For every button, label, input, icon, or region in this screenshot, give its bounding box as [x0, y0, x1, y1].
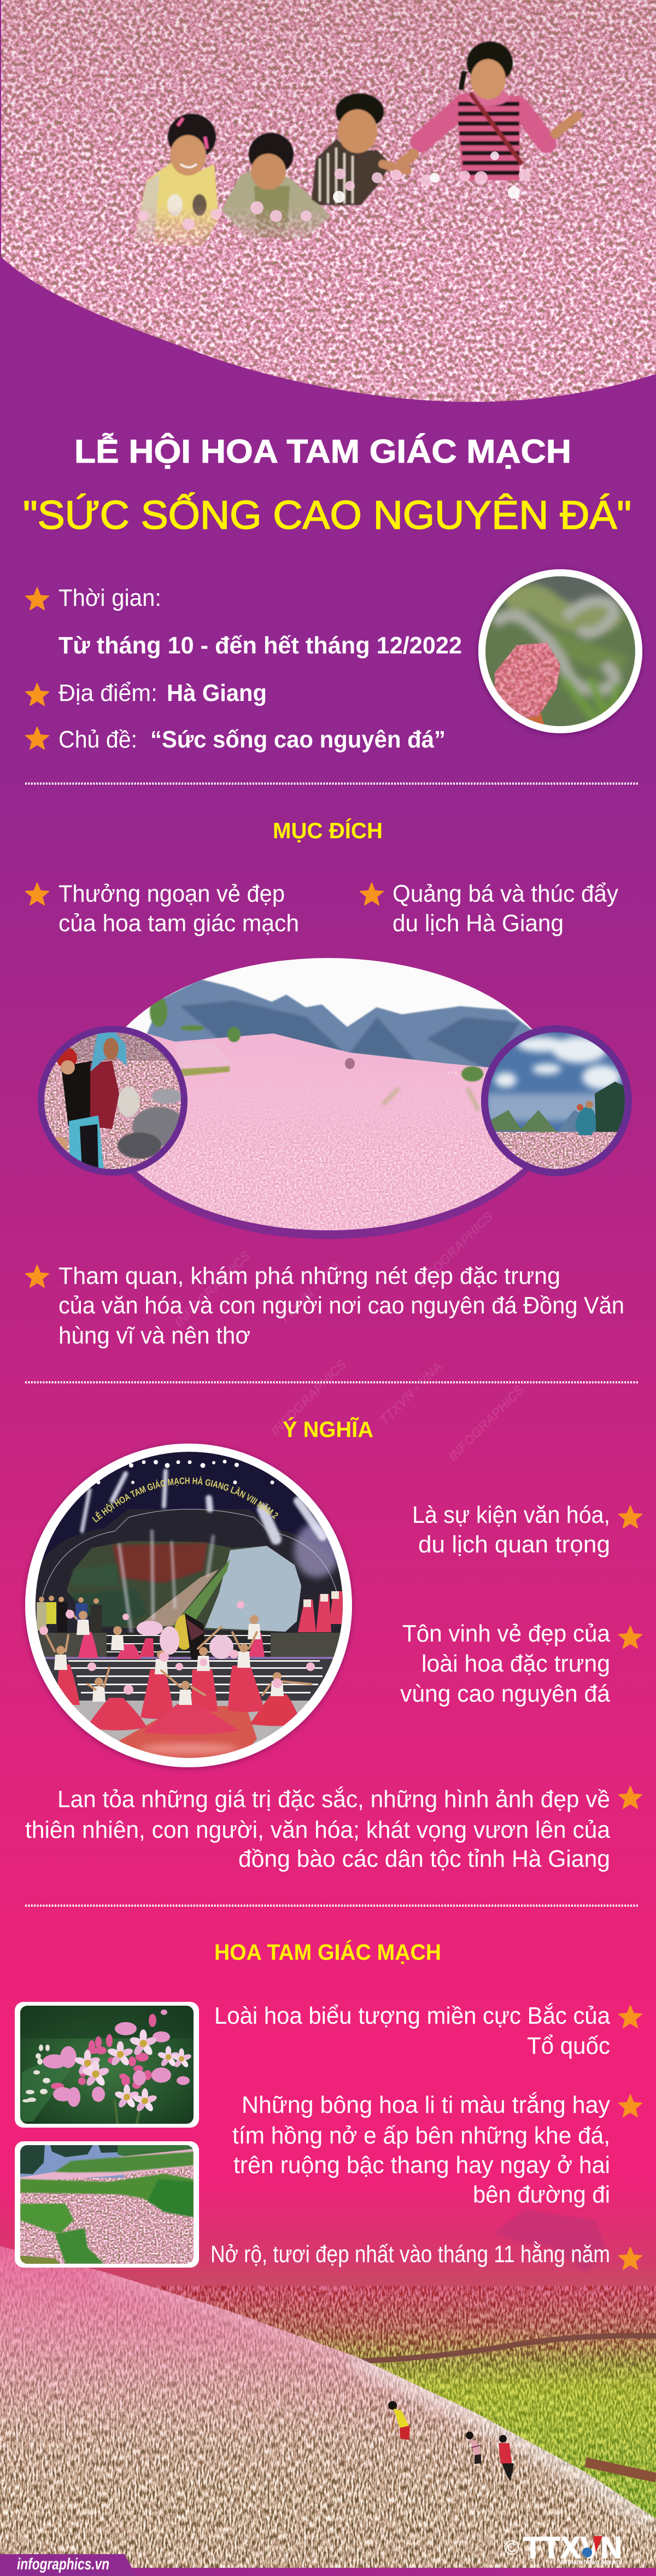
purpose item 1: Thưởng ngoạn vẻ đẹp	[58, 880, 285, 907]
lavender haze	[294, 1523, 340, 1578]
large oval photo: pink flower field and mountains	[126, 958, 532, 1239]
dotted divider	[25, 1381, 639, 1383]
theme: “Sức sống cao nguyên đá”	[150, 726, 446, 753]
child 3: striped shirt	[312, 94, 407, 205]
baby	[57, 1048, 77, 1066]
backdrop arch	[36, 1509, 344, 1635]
red flower bush	[495, 642, 560, 718]
icon: star	[26, 588, 49, 610]
rocks	[118, 1087, 185, 1159]
location: Địa điểm:	[58, 680, 157, 706]
bottom photo: hillside flower field with children	[0, 2182, 656, 2576]
watermarks: TTXVN - VNA	[276, 1259, 345, 1327]
circular photo: mountains, sky and mother	[481, 1025, 632, 1176]
meaning item 3: thiên nhiên, con người, văn hóa; khát vọng vươn lên của	[25, 1816, 611, 1843]
front flowers over the children	[138, 151, 531, 230]
purpose item 2: du lịch Hà Giang	[393, 910, 564, 937]
circular photo: festival stage performance	[22, 1441, 355, 1772]
location: Hà Giang	[167, 680, 267, 706]
purpose item 1: của hoa tam giác mạch	[58, 910, 299, 937]
purpose item 1	[26, 880, 299, 937]
flower item 1	[214, 2002, 642, 2059]
heading: Hoa tam giác mạch: HOA TAM GIÁC MẠCH	[214, 1940, 441, 1965]
dotted divider	[25, 1905, 639, 1907]
hero photo: children in buckwheat flower field	[0, 0, 656, 405]
dotted divider	[25, 782, 639, 785]
child 4: pink sweater girl	[402, 42, 577, 180]
meaning item 2: vùng cao nguyên đá	[400, 1680, 611, 1707]
icon: star	[26, 684, 49, 705]
purpose item 2: Quảng bá và thúc đẩy	[393, 880, 618, 907]
purpose item 3: của văn hóa và con người nơi cao nguyên đá Đồng Văn	[58, 1292, 624, 1319]
flower item 2: Những bông hoa li ti màu trắng hay	[242, 2092, 610, 2118]
red skirts of dancers	[56, 1632, 301, 1734]
watermarks: INFOGRAPHICS	[414, 1209, 496, 1290]
flower item 2	[232, 2092, 642, 2208]
TTXVN logo: TTXVN	[524, 2530, 622, 2565]
meaning item 2: loài hoa đặc trưng	[421, 1650, 610, 1677]
heading: Mục đích: MỤC ĐÍCH	[273, 818, 383, 843]
singers group	[37, 1596, 102, 1633]
time label: Thời gian:	[58, 585, 161, 611]
meaning item 1: Là sự kiện văn hóa,	[412, 1502, 610, 1528]
raised arms	[46, 1610, 312, 1695]
TTXVN logo: ©	[504, 2537, 519, 2560]
footer bar	[0, 2554, 656, 2576]
banner arc text	[96, 1484, 276, 1523]
distant rocks	[494, 2209, 607, 2272]
child 2: beige coat	[221, 133, 331, 238]
title	[23, 433, 631, 538]
stage wall and steps	[33, 1633, 350, 1658]
purpose item 3: hùng vĩ và nên thơ	[58, 1322, 250, 1349]
watermarks: TTXVN - VNA	[377, 1359, 446, 1428]
meaning item 2: Tôn vinh vẻ đẹp của	[402, 1620, 611, 1647]
circular photo: mother and child	[38, 1026, 188, 1176]
dancer torsos	[54, 1611, 284, 1705]
icon: star	[26, 727, 49, 749]
purpose item 3: Tham quan, khám phá những nét đẹp đặc trưng	[58, 1263, 560, 1289]
photo frame: buckwheat flower close-up	[15, 2002, 199, 2128]
circular photo: festival stage performance: LỄ HỘI HOA TAM GIÁC MẠCH HÀ GIANG LẦN VIII NĂM 2022	[92, 1476, 278, 1522]
event details list	[26, 585, 462, 753]
circular photo: mountain road and flowers	[478, 569, 642, 733]
location	[58, 680, 267, 706]
meaning item 1: du lịch quan trọng	[418, 1531, 610, 1558]
meaning item 3	[25, 1786, 642, 1872]
meaning item 3: Lan tỏa những giá trị đặc sắc, những hình ảnh đẹp về	[57, 1786, 610, 1813]
theme: Chủ đề:	[58, 726, 137, 753]
flower item 2: trên ruộng bậc thang hay ngay ở hai	[233, 2152, 610, 2178]
meaning item 1	[412, 1502, 642, 1558]
time value: Từ tháng 10 - đến hết tháng 12/2022	[58, 632, 462, 659]
photo frame: terraced flower fields	[15, 2141, 199, 2268]
flower cluster	[51, 2014, 156, 2089]
watermarks	[172, 1209, 527, 1464]
central drum and fans	[174, 1615, 194, 1650]
heading: Ý nghĩa: Ý NGHĨA	[283, 1417, 373, 1442]
TTXVN logo: Vietnam News Agency	[559, 2558, 622, 2566]
watermarks: INFOGRAPHICS	[172, 1248, 253, 1330]
flower item 2: bên đường đi	[473, 2181, 610, 2208]
watermarks: INFOGRAPHICS	[446, 1382, 527, 1464]
flower item 1: Loài hoa biểu tượng miền cực Bắc của	[214, 2002, 611, 2029]
flower item 2: tím hồng nở e ấp bên những khe đá,	[232, 2122, 610, 2149]
screen	[67, 1541, 301, 1632]
pink flower sprays	[39, 1601, 315, 1695]
woman	[62, 1061, 92, 1126]
website: infographics.vn	[17, 2555, 109, 2573]
flower item 1: Tổ quốc	[527, 2032, 610, 2059]
source tab	[0, 2554, 136, 2576]
watermarks: INFOGRAPHICS	[268, 1357, 349, 1439]
three children walking	[388, 2401, 514, 2481]
purpose item 3	[26, 1263, 624, 1349]
field paths	[360, 2335, 656, 2361]
meaning item 2	[400, 1620, 642, 1707]
child 1: yellow jacket	[134, 114, 219, 246]
right dancers group	[298, 1591, 343, 1632]
meaning item 3: đồng bào các dân tộc tỉnh Hà Giang	[238, 1845, 610, 1872]
light beams	[82, 1471, 323, 1632]
title line 2: "SỨC SỐNG CAO NGUYÊN ĐÁ"	[23, 493, 631, 538]
title line 1: LỄ HỘI HOA TAM GIÁC MẠCH	[74, 433, 571, 470]
floor and carpet	[33, 1701, 350, 1761]
purpose item 2	[360, 880, 618, 937]
mountains	[147, 979, 532, 1067]
